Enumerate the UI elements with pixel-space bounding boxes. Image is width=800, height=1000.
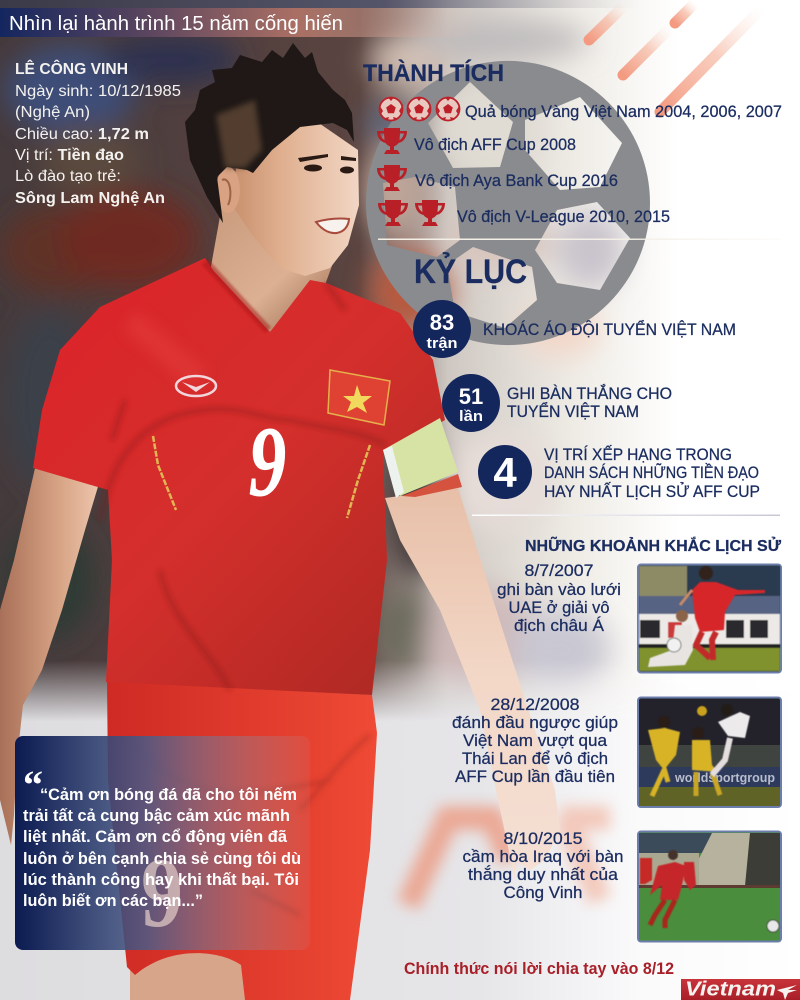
player profile text: Ngày sinh: 10/12/1985	[15, 83, 181, 100]
record: rank 4	[478, 445, 760, 501]
jersey number 9: 9	[249, 406, 286, 517]
captain armband	[383, 418, 462, 498]
player shorts	[107, 680, 377, 1000]
record: rank 4: DANH SÁCH NHỮNG TIỀN ĐẠO	[544, 462, 759, 482]
moment text: 2008	[452, 696, 618, 786]
jersey gold piping	[153, 436, 370, 518]
moment text: 2008: đánh đầu ngược giúp	[452, 714, 618, 732]
quote text: luôn biết ơn các bạn...”	[23, 891, 203, 910]
record: 83 matches: KHOÁC ÁO ĐỘI TUYỂN VIỆT NAM	[483, 320, 736, 339]
title bar: Nhìn lại hành trình 15 năm cống hiến	[9, 13, 343, 35]
Vietnam+ logo: Vietnam	[685, 978, 776, 1000]
quote text: “Cảm ơn bóng đá đã cho tôi nếm	[40, 785, 297, 804]
icons: trophies V-League	[378, 200, 445, 226]
icon: trophy AFF	[377, 128, 407, 154]
record: 51 goals: 51	[459, 384, 483, 409]
player jersey	[33, 258, 445, 695]
moment text: 2015	[462, 830, 624, 902]
player head	[185, 43, 359, 276]
record: 83 matches: trận	[426, 335, 458, 352]
moment text: 2008: Thái Lan để vô địch	[462, 750, 608, 768]
ghost shirt number under quote: 9	[141, 837, 183, 948]
achievements list	[377, 98, 782, 226]
player profile text	[15, 60, 181, 207]
icon: quote mark: “	[23, 762, 43, 807]
moment text: 2015: 8/10/2015	[504, 830, 582, 848]
photo: 2007 match	[638, 564, 781, 672]
top strip	[0, 0, 640, 8]
record: rank 4: 4	[493, 449, 517, 496]
farewell line: Chính thức nói lời chia tay vào 8/12	[404, 959, 674, 978]
icon: trophy Aya	[377, 165, 407, 191]
achievement: Aya Bank Cup: Vô địch Aya Bank Cup 2016	[415, 171, 618, 190]
record: 51 goals: TUYỂN VIỆT NAM	[507, 402, 639, 421]
streaks: falling ball motion lines	[589, 3, 762, 112]
player hair	[185, 43, 354, 223]
title bar	[0, 8, 480, 37]
moment text: 2008: 28/12/2008	[490, 696, 580, 714]
jersey brand logo	[176, 376, 216, 396]
quote text: liệt nhất. Cảm ơn cổ động viên đã	[23, 827, 288, 846]
moment text: 2007: ghi bàn vào lưới	[497, 581, 621, 599]
moment text: 2007: UAE ở giải vô	[508, 599, 610, 617]
quote text: lúc thành công hay khi thất bại. Tôi	[23, 870, 299, 889]
football graphic	[366, 61, 650, 345]
player thigh	[130, 950, 245, 1000]
player neck	[210, 205, 345, 332]
record: 83 matches: 83	[430, 310, 454, 335]
photo: 2015 match	[638, 832, 781, 942]
record: 51 goals: lần	[459, 408, 483, 425]
player right arm and hand	[385, 488, 560, 880]
players in photo	[640, 850, 779, 932]
record: 83 matches	[413, 300, 736, 358]
achievement: AFF Cup: Vô địch AFF Cup 2008	[414, 135, 576, 154]
photo: 2008 match	[638, 698, 781, 807]
icons: golden balls	[380, 98, 460, 120]
heading: historic moments: NHỮNG KHOẢNH KHẮC LỊCH SỬ	[525, 535, 782, 555]
blurred letters behind	[408, 818, 660, 905]
moment text: 2015: thắng duy nhất của	[468, 865, 619, 884]
Vietnam+ logo	[681, 978, 800, 1000]
player profile text: (Nghệ An)	[15, 104, 90, 121]
moment text: 2015: Công Vinh	[504, 884, 582, 902]
quote text	[23, 785, 301, 910]
quote text: trải tất cả cung bậc cảm xúc mãnh	[23, 806, 290, 825]
achievement: golden ball: Quả bóng Vàng Việt Nam 2004, 2006, 2007	[465, 102, 782, 121]
moment text: 2015: cầm hòa Iraq với bàn	[462, 848, 624, 866]
player profile text: Vị trí: Tiền đạo	[15, 147, 124, 164]
heading: achievements: THÀNH TÍCH	[363, 59, 504, 87]
player profile text: Chiều cao: 1,72 m	[15, 126, 149, 143]
heading: records: KỶ LỤC	[414, 253, 527, 291]
players in photo	[648, 704, 750, 796]
record: rank 4: VỊ TRÍ XẾP HẠNG TRONG	[544, 445, 732, 464]
moment text: 2007: 8/7/2007	[524, 562, 594, 580]
quote panel	[15, 736, 310, 950]
player smile	[316, 218, 349, 233]
player profile text: Lò đào tạo trẻ:	[15, 168, 121, 185]
player profile text: Sông Lam Nghệ An	[15, 190, 165, 207]
jersey flag	[328, 370, 390, 425]
moment text: 2007: địch châu Á	[514, 616, 604, 635]
quote text: luôn ở bên cạnh chia sẻ cùng tôi dù	[23, 849, 301, 868]
player photo illustration	[0, 43, 560, 1000]
record: 51 goals: GHI BÀN THẮNG CHO	[507, 384, 672, 403]
moment text: 2008: Việt Nam vượt qua	[463, 732, 608, 750]
achievement: V-League: Vô địch V-League 2010, 2015	[457, 207, 670, 226]
moment text: 2008: AFF Cup lần đầu tiên	[455, 768, 615, 786]
record: rank 4: HAY NHẤT LỊCH SỬ AFF CUP	[544, 482, 760, 501]
player left arm	[0, 455, 100, 845]
moment text: 2007	[497, 562, 621, 635]
players in photo	[648, 566, 765, 667]
player eyes and brows	[298, 154, 356, 174]
record: 51 goals	[442, 374, 672, 432]
player profile text: LÊ CÔNG VINH	[15, 60, 128, 78]
photo: 2008 match: worldsportgroup	[674, 770, 775, 785]
